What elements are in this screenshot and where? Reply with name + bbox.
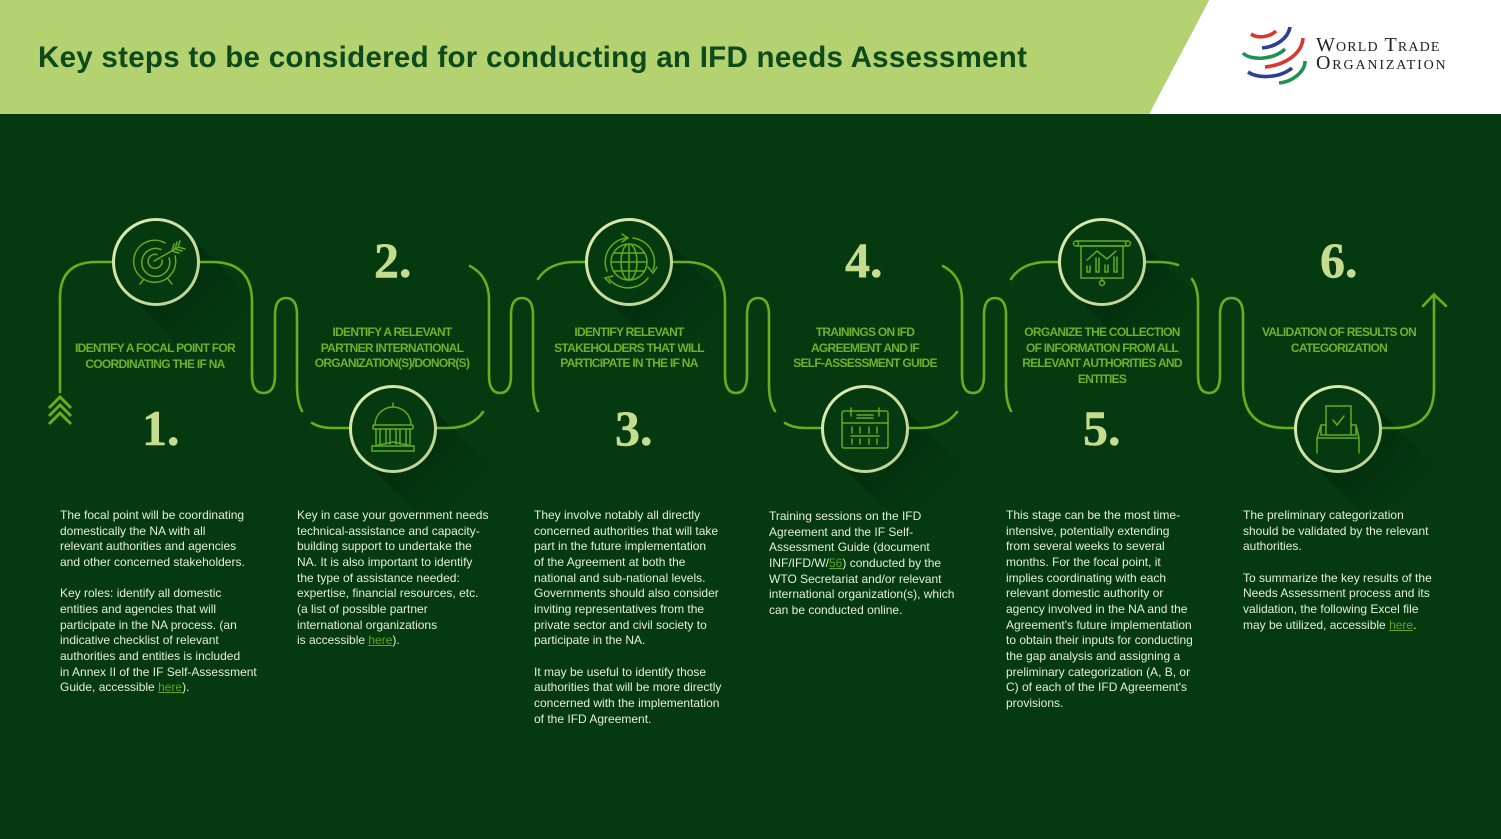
step 3 body text bbox=[534, 508, 722, 726]
step 3 number: 3. bbox=[615, 400, 652, 456]
step 2 body text: NA. It is also important to identify bbox=[297, 555, 472, 569]
step 6 body text: validation, the following Excel file bbox=[1243, 602, 1418, 616]
step 2 body text: the type of assistance needed: bbox=[297, 571, 460, 585]
step 2 body text: international organizations bbox=[297, 618, 437, 632]
step 5 badge: presentation chart icon bbox=[1060, 220, 1144, 304]
step 5 heading: OF INFORMATION FROM ALL bbox=[1026, 341, 1178, 355]
step 3 body text: Governments should also consider bbox=[534, 586, 719, 600]
step 6 body text: Needs Assessment process and its bbox=[1243, 586, 1430, 600]
step 6 heading: VALIDATION OF RESULTS ON bbox=[1262, 325, 1416, 339]
step 6 badge: ballot box icon bbox=[1296, 386, 1380, 472]
connecting line bbox=[60, 262, 1434, 428]
step 1 heading: IDENTIFY A FOCAL POINT FOR bbox=[75, 341, 235, 355]
step 1 body text bbox=[60, 508, 257, 694]
step 6 body text: should be validated by the relevant bbox=[1243, 524, 1428, 538]
step 5 body text: C) of each of the IFD Agreement's bbox=[1006, 680, 1187, 694]
step 3 heading: IDENTIFY RELEVANT bbox=[574, 325, 684, 339]
step 3 body text: authorities that will be more directly bbox=[534, 680, 721, 694]
title: Key steps to be considered for conducting an IFD needs Assessment bbox=[38, 41, 1027, 74]
step 3 body text: of the IFD Agreement. bbox=[534, 712, 651, 726]
step 1 body text: entities and agencies that will bbox=[60, 602, 216, 616]
icon: arrow head at end bbox=[1423, 294, 1446, 306]
step 5 body text: the gap analysis and assigning a bbox=[1006, 649, 1180, 663]
step 4 badge: calendar icon bbox=[822, 386, 908, 472]
step 5 heading: RELEVANT AUTHORITIES AND bbox=[1022, 356, 1182, 370]
step 5 heading: ENTITIES bbox=[1078, 372, 1126, 386]
step 5 body text bbox=[1006, 508, 1193, 710]
step 3 body text: of the Agreement at both the bbox=[534, 555, 685, 569]
step 4 body text: Assessment Guide (document bbox=[769, 540, 930, 554]
step 2 number: 2. bbox=[374, 232, 412, 288]
step 4 heading: SELF-ASSESSMENT GUIDE bbox=[793, 356, 937, 370]
step 5 body text: from several weeks to several bbox=[1006, 539, 1165, 553]
icon: start chevrons bbox=[49, 397, 71, 424]
step 3 body text: It may be useful to identify those bbox=[534, 665, 706, 679]
step 5 heading: ORGANIZE THE COLLECTION bbox=[1024, 325, 1180, 339]
step 1 heading bbox=[75, 341, 236, 371]
step 6 body text: To summarize the key results of the bbox=[1243, 571, 1432, 585]
step 2 heading bbox=[315, 325, 470, 370]
logo wordmark bbox=[1316, 34, 1448, 74]
step 2 heading: IDENTIFY A RELEVANT bbox=[332, 325, 452, 339]
step 1 body text: The focal point will be coordinating bbox=[60, 508, 244, 522]
step 2 body text bbox=[297, 508, 488, 647]
step 4 body text: can be conducted online. bbox=[769, 603, 902, 617]
step 4 number: 4. bbox=[845, 232, 882, 288]
step 6 heading bbox=[1262, 325, 1416, 355]
step 3 body text: private sector and civil society to bbox=[534, 618, 707, 632]
step 2 badge: dome building icon bbox=[350, 386, 436, 472]
step 3 body text: concerned with the implementation bbox=[534, 696, 719, 710]
step 1 badge: target icon bbox=[114, 220, 198, 304]
circle shadows bbox=[126, 232, 1458, 549]
step 3 body text: participate in the NA. bbox=[534, 633, 645, 647]
step 5 body text: implies coordinating with each bbox=[1006, 571, 1166, 585]
step 1 body text: authorities and entities is included bbox=[60, 649, 240, 663]
icon: WTO globe logo bbox=[1242, 26, 1307, 85]
step 4 heading bbox=[793, 325, 938, 370]
step 5 body text: preliminary categorization (A, B, or bbox=[1006, 665, 1190, 679]
step 3 heading bbox=[554, 325, 704, 370]
step 1 heading: COORDINATING THE IF NA bbox=[85, 357, 225, 371]
logo wordmark: World Trade bbox=[1316, 34, 1441, 56]
step 6 number: 6. bbox=[1320, 232, 1358, 288]
step 1 body text: relevant authorities and agencies bbox=[60, 539, 236, 553]
step 5 number: 5. bbox=[1083, 400, 1120, 456]
step 4 heading: TRAININGS ON IFD bbox=[816, 325, 914, 339]
step 6 body text: authorities. bbox=[1243, 539, 1302, 553]
step 4 heading: AGREEMENT AND IF bbox=[811, 341, 919, 355]
step 2 body text: Key in case your government needs bbox=[297, 508, 488, 522]
step 2 body text: is accessible here). bbox=[297, 633, 400, 647]
step 4 body text: international organization(s), which bbox=[769, 587, 954, 601]
step 3 body text: inviting representatives from the bbox=[534, 602, 704, 616]
step 2 body text: building support to undertake the bbox=[297, 539, 472, 553]
step 5 heading bbox=[1022, 325, 1182, 386]
step 5 body text: provisions. bbox=[1006, 696, 1063, 710]
step 2 body text: expertise, financial resources, etc. bbox=[297, 586, 478, 600]
step 3 body text: part in the future implementation bbox=[534, 539, 706, 553]
step 1 body text: indicative checklist of relevant bbox=[60, 633, 219, 647]
step 1 body text: Guide, accessible here). bbox=[60, 680, 189, 694]
step 6 body text: may be utilized, accessible here. bbox=[1243, 618, 1416, 632]
step 5 body text: relevant domestic authority or bbox=[1006, 586, 1163, 600]
step 6 body text bbox=[1243, 508, 1432, 632]
step 5 body text: months. For the focal point, it bbox=[1006, 555, 1161, 569]
step 2 heading: PARTNER INTERNATIONAL bbox=[321, 341, 463, 355]
step 6 heading: CATEGORIZATION bbox=[1291, 341, 1387, 355]
step 2 body text: technical-assistance and capacity- bbox=[297, 524, 480, 538]
step 1 body text: and other concerned stakeholders. bbox=[60, 555, 245, 569]
step 3 badge: globe icon bbox=[586, 220, 672, 304]
step 3 body text: national and sub-national levels. bbox=[534, 571, 705, 585]
step 2 body text: (a list of possible partner bbox=[297, 602, 428, 616]
step 4 body text bbox=[769, 509, 954, 617]
step 1 body text: Key roles: identify all domestic bbox=[60, 586, 221, 600]
step 5 body text: intensive, potentially extending bbox=[1006, 524, 1169, 538]
logo wordmark: Organization bbox=[1316, 52, 1448, 74]
step 1 body text: participate in the NA process. (an bbox=[60, 618, 237, 632]
step 3 body text: They involve notably all directly bbox=[534, 508, 700, 522]
step 4 body text: Training sessions on the IFD bbox=[769, 509, 921, 523]
step 3 body text: concerned authorities that will take bbox=[534, 524, 718, 538]
step 4 body text: INF/IFD/W/56) conducted by the bbox=[769, 556, 941, 570]
step 3 heading: PARTICIPATE IN THE IF NA bbox=[560, 356, 698, 370]
step 6 body text: The preliminary categorization bbox=[1243, 508, 1404, 522]
step 5 body text: This stage can be the most time- bbox=[1006, 508, 1180, 522]
step 3 heading: STAKEHOLDERS THAT WILL bbox=[554, 341, 704, 355]
step 5 body text: agency involved in the NA and the bbox=[1006, 602, 1187, 616]
step 4 body text: WTO Secretariat and/or relevant bbox=[769, 572, 942, 586]
step 5 body text: to obtain their inputs for conducting bbox=[1006, 633, 1193, 647]
step 5 body text: Agreement's future implementation bbox=[1006, 618, 1192, 632]
step 1 body text: domestically the NA with all bbox=[60, 524, 205, 538]
header banner bbox=[0, 0, 1501, 114]
step 2 heading: ORGANIZATION(S)/DONOR(S) bbox=[315, 356, 469, 370]
step 1 body text: in Annex II of the IF Self-Assessment bbox=[60, 665, 257, 679]
step 4 body text: Agreement and the IF Self- bbox=[769, 525, 913, 539]
step 1 number: 1. bbox=[142, 400, 180, 456]
